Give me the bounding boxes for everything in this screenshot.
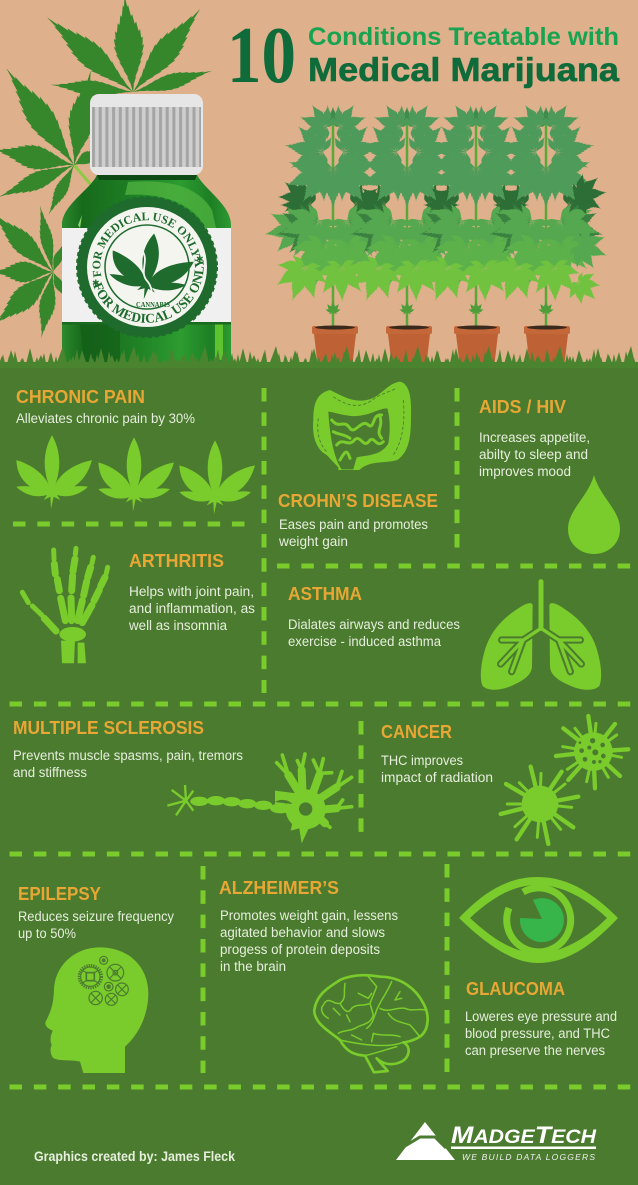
seal text top: FOR MEDICAL USE ONLY: [92, 212, 200, 278]
body text: abilty to sleep and: [479, 447, 588, 462]
body text: agitated behavior and slows: [220, 925, 385, 940]
body text: THC improves: [381, 753, 463, 768]
title line 1: Conditions Treatable with: [308, 23, 619, 51]
heading: CROHN’S DISEASE: [278, 491, 438, 511]
illustration: leaf top: [39, 0, 214, 102]
body text: exercise - induced asthma: [288, 634, 441, 649]
panel: crohn's disease: [278, 382, 438, 549]
icon: intestines: [313, 382, 411, 470]
icon: virus small: [501, 767, 578, 844]
body text: well as insomnia: [128, 618, 227, 633]
icon: hand bones: [22, 548, 108, 663]
panel: cancer: [381, 716, 628, 844]
seal star left: ✱: [92, 279, 100, 289]
body text: [220, 908, 398, 974]
panel: arthritis: [22, 548, 255, 663]
illustration: leaf lower left: [0, 204, 69, 339]
body text: [381, 753, 493, 785]
body text: Eases pain and promotes: [279, 517, 428, 532]
body text: improves mood: [479, 464, 571, 479]
icon: virus large: [556, 716, 628, 788]
illustration: medicine bottle: [62, 94, 231, 362]
body text: blood pressure, and THC: [465, 1026, 610, 1041]
panel: chronic pain: [16, 387, 255, 514]
body text: progess of protein deposits: [220, 942, 380, 957]
illustration: grass: [0, 346, 638, 368]
icon: brain: [314, 975, 428, 1072]
heading: MULTIPLE SCLEROSIS: [13, 718, 204, 738]
bottle cap: [90, 94, 203, 175]
body text: Increases appetite,: [479, 430, 590, 445]
body text: Helps with joint pain,: [129, 584, 254, 599]
icon: drop: [568, 475, 620, 554]
body text: [13, 748, 243, 780]
body text: [479, 430, 590, 479]
heading: ARTHRITIS: [129, 551, 224, 571]
panel: alzheimer's: [219, 878, 428, 1072]
seal: [76, 196, 218, 338]
seal cannabis leaf: [107, 228, 197, 305]
logo mark: [396, 1122, 455, 1160]
title: [227, 12, 620, 100]
body text: in the brain: [220, 959, 286, 974]
body text: [278, 517, 428, 549]
icon: three leaves: [16, 435, 255, 514]
illustration: four cannabis plants: [260, 96, 615, 326]
heading: ALZHEIMER’S: [219, 878, 339, 898]
background: green ground: [0, 366, 638, 1185]
heading: GLAUCOMA: [466, 979, 565, 999]
logo tagline: WE BUILD DATA LOGGERS: [462, 1152, 595, 1162]
left side extra foliage: [260, 176, 313, 261]
body text: Reduces seizure frequency: [18, 909, 174, 924]
body text: Loweres eye pressure and: [465, 1009, 617, 1024]
panel: asthma: [288, 582, 601, 690]
seal small text: CANNABIS: [136, 301, 170, 309]
logo: madgetech: [396, 1122, 597, 1162]
dashed panel dividers: [0, 388, 638, 1087]
heading: EPILEPSY: [18, 884, 101, 904]
icon: neuron: [167, 754, 352, 843]
body text: Alleviates chronic pain by 30%: [16, 411, 195, 426]
heading: AIDS / HIV: [479, 397, 566, 417]
panel: multiple sclerosis: [13, 718, 352, 843]
number 10: 10: [227, 12, 296, 100]
icon: head with gears: [45, 947, 148, 1073]
panel: glaucoma: [459, 877, 618, 1058]
heading: ASTHMA: [288, 584, 362, 604]
body text: [465, 1009, 617, 1058]
title line 2: Medical Marijuana: [308, 51, 620, 88]
body text: and stiffness: [13, 765, 87, 780]
body text: Prevents muscle spasms, pain, tremors: [13, 748, 243, 763]
seal text bottom: FOR MEDICAL USE ONLY: [93, 258, 204, 323]
heading: CHRONIC PAIN: [16, 387, 145, 407]
body text: Promotes weight gain, lessens: [220, 908, 398, 923]
body text: impact of radiation: [381, 770, 493, 785]
body text: weight gain: [278, 534, 348, 549]
seal star right: ✱: [196, 255, 204, 265]
body text: and inflammation, as: [129, 601, 255, 616]
panel: aids / hiv: [479, 397, 620, 554]
right side extra foliage: [560, 170, 615, 313]
logo rule: [451, 1146, 596, 1149]
body text: Dialates airways and reduces: [288, 617, 460, 632]
body text: up to 50%: [18, 926, 76, 941]
bottle highlight: [125, 181, 216, 228]
heading: CANCER: [381, 722, 452, 742]
body text: [128, 584, 255, 633]
body text: [18, 909, 174, 941]
body text: [288, 617, 460, 649]
illustration: leaf left: [0, 60, 104, 218]
credit line: Graphics created by: James Fleck: [34, 1149, 235, 1164]
icon: lungs: [481, 582, 601, 690]
panel: epilepsy: [18, 884, 174, 1073]
bottle body: [62, 175, 231, 368]
icon: eye: [459, 877, 618, 963]
bottle label band: [62, 228, 231, 322]
background: tan sky: [0, 0, 638, 370]
illustration: flower pots: [312, 326, 570, 368]
body text: can preserve the nerves: [465, 1043, 605, 1058]
logo wordmark: MADGE TECH: [451, 1122, 597, 1149]
